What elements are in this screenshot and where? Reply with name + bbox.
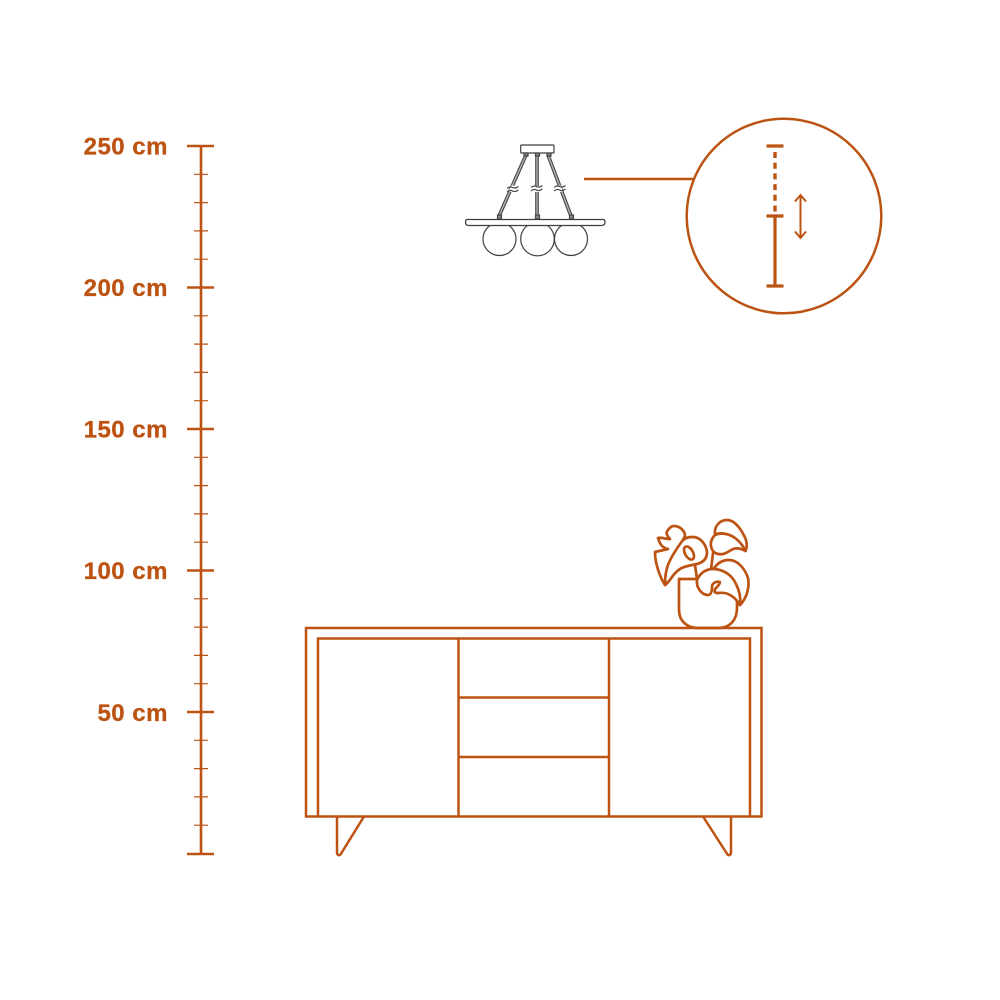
height ruler [84, 134, 214, 854]
top heart leaf [711, 520, 747, 554]
sideboard body [306, 628, 762, 816]
ruler labels: 50 cm [97, 700, 168, 727]
right leg [703, 816, 731, 855]
lamp cable fittings [498, 153, 574, 219]
lamp cables [499, 155, 571, 216]
lamp bar [466, 220, 605, 226]
dotted extension [773, 152, 777, 214]
large back leaf [713, 560, 749, 605]
large front leaf [697, 569, 740, 605]
lamp canopy [521, 145, 554, 153]
sideboard doors and drawers [458, 638, 609, 816]
ruler labels: 250 cm [84, 134, 168, 160]
ruler labels [84, 134, 168, 727]
ruler axis and major ticks [187, 146, 214, 854]
pendant lamp [466, 145, 605, 256]
ruler labels: 150 cm [84, 416, 168, 444]
plant stems [695, 553, 713, 579]
sideboard [306, 628, 762, 855]
adjustable height symbol [766, 146, 784, 286]
leaf eye [682, 545, 696, 561]
plant pot [679, 579, 737, 628]
ruler minor ticks [194, 174, 208, 825]
sideboard inner frame [318, 638, 750, 816]
ruler labels: 100 cm [84, 558, 168, 585]
callout leader line [584, 178, 693, 180]
adjustment arrow [795, 195, 806, 238]
potted plant [655, 520, 749, 628]
monstera leaf [655, 526, 707, 585]
lamp globes [483, 222, 588, 256]
left leg [337, 816, 364, 855]
ruler labels: 200 cm [84, 275, 168, 302]
solid drop with end caps [766, 146, 784, 286]
callout circle [687, 119, 881, 313]
